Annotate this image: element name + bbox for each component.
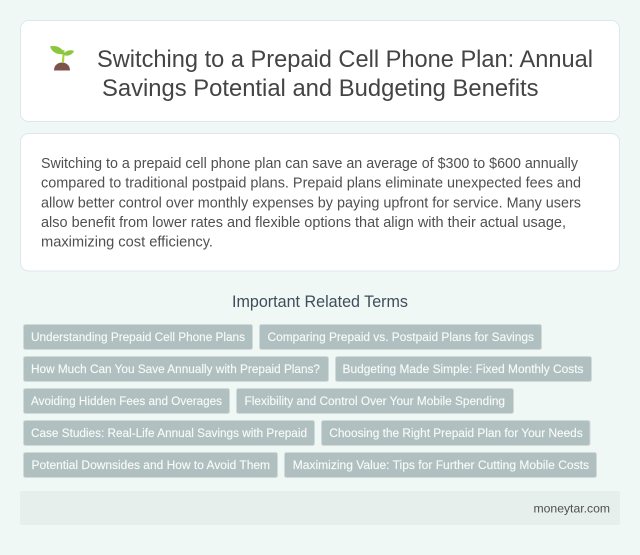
text block: summary: allow better control over monthly expenses by paying upfront for service. Many users	[41, 196, 581, 212]
tags: related terms	[24, 324, 596, 478]
tag: Case Studies: Real-Life Annual Savings with Prepaid	[31, 426, 307, 440]
title: Switching to a Prepaid Cell Phone Plan: Annual	[97, 46, 593, 73]
tag	[336, 356, 592, 382]
footer	[20, 491, 620, 525]
tag	[284, 452, 596, 478]
tag: Potential Downsides and How to Avoid Them	[32, 458, 270, 472]
title	[97, 46, 593, 102]
text block: summary: maximizing cost efficiency.	[41, 234, 213, 250]
tag	[236, 388, 514, 414]
tag	[24, 356, 328, 382]
tag: Choosing the Right Prepaid Plan for Your Needs	[329, 426, 583, 440]
panel: summary	[20, 134, 620, 271]
panel: header	[20, 20, 620, 122]
footer: source: moneytar.com	[534, 502, 610, 516]
tag: Avoiding Hidden Fees and Overages	[31, 394, 222, 408]
heading: related terms: Important Related Terms	[232, 293, 408, 311]
tag	[24, 324, 252, 350]
tag: Maximizing Value: Tips for Further Cutting Mobile Costs	[293, 458, 589, 472]
tag	[24, 420, 314, 446]
tag	[260, 324, 542, 350]
tag	[322, 420, 590, 446]
title: Savings Potential and Budgeting Benefits	[102, 75, 538, 102]
tag: Understanding Prepaid Cell Phone Plans	[31, 330, 245, 344]
tag: Budgeting Made Simple: Fixed Monthly Costs	[342, 362, 584, 376]
tag	[24, 452, 278, 478]
text block: summary	[41, 156, 581, 250]
text block: summary: Switching to a prepaid cell phone plan can save an average of $300 to $600 annually	[41, 156, 579, 172]
tag: How Much Can You Save Annually with Prepaid Plans?	[31, 362, 320, 376]
tag: Comparing Prepaid vs. Postpaid Plans for Savings	[268, 330, 534, 344]
tag: Flexibility and Control Over Your Mobile Spending	[244, 394, 505, 408]
text block: summary: also benefit from lower rates and flexible options that align with their actual usage,	[41, 215, 566, 231]
tag	[24, 388, 230, 414]
icon: seedling	[50, 46, 74, 70]
text block: summary: compared to traditional postpaid plans. Prepaid plans eliminate unexpected fees and	[41, 176, 581, 192]
